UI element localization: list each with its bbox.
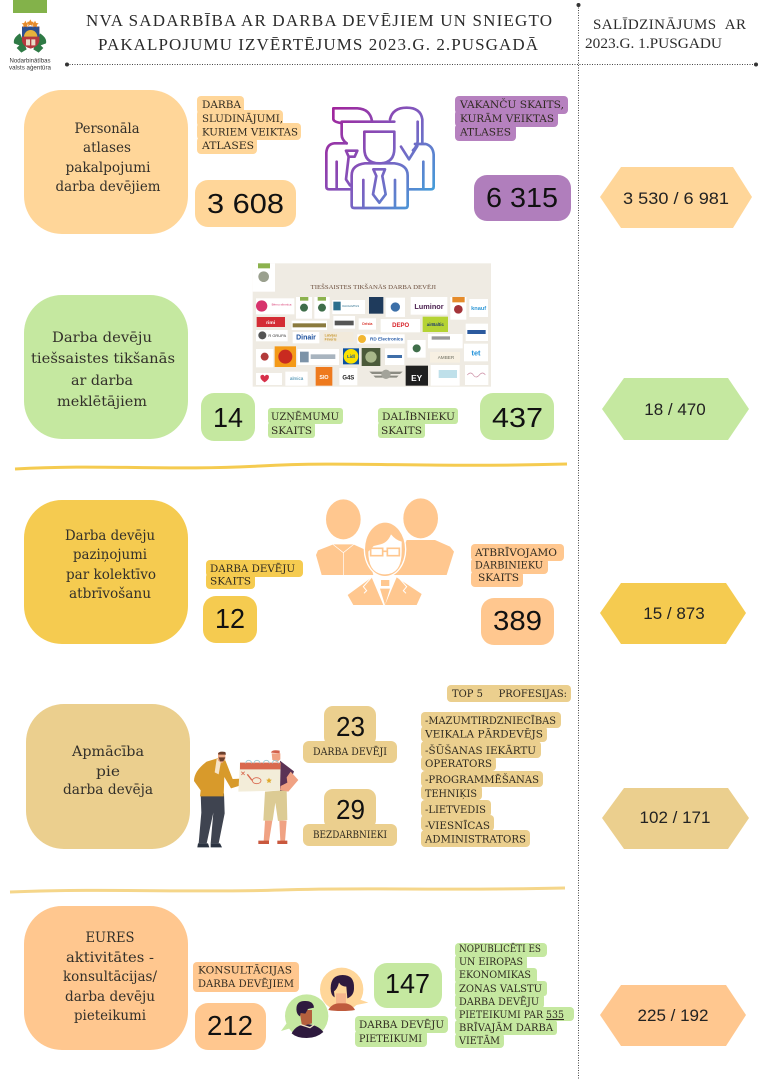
stat: unemployed 29: 29 bbox=[336, 794, 365, 825]
image: employer logos collage: almica bbox=[290, 376, 304, 381]
image: employer logos collage: TIEŠSAISTES TIKŠANĀS DARBA DEVĒJI bbox=[311, 283, 436, 291]
label: employer applications: DARBA DEVĒJU bbox=[359, 1018, 444, 1031]
icon: conversation avatars bbox=[281, 968, 368, 1038]
comparison hexagon 4: 102 / 171 bbox=[640, 808, 710, 827]
number: participants bbox=[480, 393, 554, 440]
panel: online meetings: meklētājiem bbox=[57, 394, 147, 410]
logo: Nodarbinātības valsts aģentūra bbox=[9, 0, 51, 72]
comparison hexagon 5 bbox=[600, 985, 746, 1046]
label: employers count bbox=[206, 560, 303, 589]
label: job ads: KURIEM VEIKTAS bbox=[202, 126, 298, 138]
panel: EURES activities bbox=[24, 906, 188, 1050]
label: employer applications bbox=[355, 1016, 448, 1047]
image: employer logos collage bbox=[253, 263, 491, 387]
label: vacancies: ATLASES bbox=[459, 126, 511, 138]
image: employer logos collage: RD Electronics bbox=[370, 337, 404, 342]
number: participants: 437 bbox=[492, 402, 543, 433]
text block: unpublished EEA vacancies: UN EIROPAS bbox=[459, 956, 523, 968]
panel: online meetings bbox=[24, 295, 188, 439]
logo: Nodarbinātības valsts aģentūra: valsts aģentūra bbox=[9, 64, 51, 72]
number: applications bbox=[374, 963, 442, 1008]
list: top 5 professions: -ŠŪŠANAS IEKĀRTU bbox=[425, 743, 536, 757]
number: employees: 389 bbox=[493, 605, 542, 636]
comparison hexagon 3: 15 / 873 bbox=[643, 604, 705, 623]
number: job ads: 3 608 bbox=[207, 188, 284, 219]
icon: business people bbox=[326, 108, 434, 208]
label: participants: SKAITS bbox=[381, 425, 422, 437]
comparison column heading bbox=[585, 17, 746, 52]
panel: workplace training bbox=[26, 704, 190, 849]
image: employer logos collage: DAUGAVPILS bbox=[342, 304, 359, 308]
panel: collective redundancy: atbrīvošanu bbox=[69, 586, 151, 602]
panel: workplace training: darba devēja bbox=[63, 782, 153, 798]
image: employer logos collage: EY bbox=[411, 373, 423, 383]
number: vacancies: 6 315 bbox=[486, 182, 558, 213]
image: employer logos collage: SIO bbox=[319, 375, 329, 381]
panel: EURES activities: aktivitātes - bbox=[66, 950, 154, 966]
image: employer logos collage: Drīsla bbox=[362, 322, 373, 326]
number: job ads bbox=[195, 180, 296, 227]
title bbox=[86, 11, 552, 54]
label: companies bbox=[268, 408, 343, 438]
label: employees dismissed: SKAITS bbox=[478, 572, 519, 584]
image: employer logos collage: Luminor bbox=[414, 302, 444, 311]
list: top 5 professions: TEHNIĶIS bbox=[425, 788, 477, 800]
stat: unemployed 29: BEZDARBNIEKI bbox=[313, 829, 387, 841]
panel: collective redundancy: Darba devēju bbox=[65, 528, 155, 544]
label: vacancies bbox=[455, 96, 568, 141]
label: participants bbox=[378, 408, 458, 438]
panel: EURES activities: konsultācijas/ bbox=[63, 969, 157, 985]
panel: recruitment services: pakalpojumi bbox=[66, 160, 151, 176]
panel: recruitment services: Personāla bbox=[74, 121, 140, 137]
label: vacancies: KURĀM VEIKTAS bbox=[460, 112, 554, 125]
image: employer logos collage: rimi bbox=[266, 320, 276, 326]
number: employers: 12 bbox=[215, 603, 245, 634]
number: employees bbox=[481, 598, 554, 645]
text block: unpublished EEA vacancies: NOPUBLICĒTI ES bbox=[459, 942, 541, 955]
stat: employers 23: 23 bbox=[336, 711, 365, 742]
logo: Nodarbinātības valsts aģentūra: Nodarbinātības bbox=[10, 58, 51, 64]
text block: unpublished EEA vacancies: EKONOMIKAS bbox=[459, 969, 531, 981]
panel: online meetings: ar darba bbox=[71, 373, 133, 389]
panel: collective redundancy bbox=[24, 500, 188, 644]
number: applications: 147 bbox=[385, 968, 430, 999]
image: employer logos collage: Bērnu slimnīca bbox=[272, 303, 292, 307]
number: employers bbox=[203, 596, 257, 643]
panel: collective redundancy: paziņojumi bbox=[73, 547, 148, 563]
list: top 5 professions: VEIKALA PĀRDEVĒJS bbox=[424, 728, 543, 740]
list: top 5 professions bbox=[421, 685, 571, 847]
panel: recruitment services: atlases bbox=[83, 140, 131, 156]
label: job ads: DARBA bbox=[202, 99, 241, 111]
image: employer logos collage: DEPO bbox=[392, 323, 409, 329]
comparison column heading: SALĪDZINĀJUMS AR bbox=[593, 17, 746, 33]
image: employer logos collage: tet bbox=[472, 348, 481, 357]
panel: workplace training: Apmācība bbox=[71, 744, 144, 760]
list: top 5 professions: -MAZUMTIRDZNIECĪBAS bbox=[425, 714, 556, 727]
text block: unpublished EEA vacancies: BRĪVAJĀM DARBA bbox=[459, 1021, 553, 1034]
panel: EURES activities: pieteikumi bbox=[74, 1008, 147, 1024]
label: employers count: DARBA DEVĒJU bbox=[210, 562, 295, 575]
stat: employers 23 bbox=[303, 706, 397, 763]
list: top 5 professions: -LIETVEDIS bbox=[425, 804, 486, 816]
panel: online meetings: tiešsaistes tikšanās bbox=[31, 351, 175, 367]
panel: workplace training: pie bbox=[96, 764, 120, 780]
number: companies bbox=[201, 393, 255, 441]
number: consultations: 212 bbox=[207, 1010, 253, 1041]
label: employers count: SKAITS bbox=[210, 576, 251, 588]
number: consultations bbox=[195, 1003, 266, 1050]
comparison hexagon 5: 225 / 192 bbox=[638, 1006, 708, 1025]
panel: recruitment services: darba devējiem bbox=[56, 179, 161, 195]
panel: online meetings: Darba devēju bbox=[52, 330, 152, 346]
label: vacancies: VAKANČU SKAITS, bbox=[459, 97, 564, 111]
panel: EURES activities: darba devēju bbox=[65, 989, 155, 1005]
comparison hexagon 3 bbox=[600, 583, 746, 644]
label: companies: SKAITS bbox=[271, 425, 312, 437]
list: top 5 professions: OPERATORS bbox=[425, 758, 492, 770]
number: companies: 14 bbox=[213, 402, 243, 433]
text block: unpublished EEA vacancies: VIETĀM bbox=[458, 1034, 500, 1047]
label: participants: DALĪBNIEKU bbox=[382, 410, 455, 423]
stat: unemployed 29 bbox=[303, 789, 397, 846]
image: employer logos collage: Dinair bbox=[296, 334, 316, 341]
image: employer logos collage: knauf bbox=[471, 306, 486, 312]
label: employees dismissed: ATBRĪVOJAMO bbox=[474, 546, 557, 559]
title: PAKALPOJUMU IZVĒRTĒJUMS 2023.G. 2.PUSGADĀ bbox=[98, 35, 539, 54]
image: employer logos collage: Finieris bbox=[325, 337, 337, 341]
image: employer logos collage: AMBER bbox=[438, 355, 455, 360]
image: employer logos collage: airBaltic bbox=[427, 322, 444, 327]
comparison hexagon 2: 18 / 470 bbox=[644, 400, 706, 419]
panel: EURES activities: EURES bbox=[86, 930, 134, 946]
text block: unpublished EEA vacancies: ZONAS VALSTU bbox=[459, 983, 542, 995]
panel: recruitment services bbox=[24, 90, 188, 234]
illustration: two people with calendar bbox=[194, 750, 298, 847]
icon: three people with glasses bbox=[316, 498, 454, 605]
label: consultations bbox=[193, 962, 299, 992]
image: employer logos collage: Lidl bbox=[347, 354, 355, 359]
list: top 5 professions: TOP 5 PROFESIJAS: bbox=[452, 688, 567, 700]
panel: collective redundancy: par kolektīvo bbox=[66, 567, 156, 583]
text block: unpublished EEA vacancies: PIETEIKUMI PAR 535 bbox=[459, 1009, 564, 1021]
text block: unpublished EEA vacancies: DARBA DEVĒJU bbox=[459, 995, 539, 1008]
label: consultations: DARBA DEVĒJIEM bbox=[198, 977, 294, 990]
image: employer logos collage: R GRUPA bbox=[268, 333, 287, 338]
list: top 5 professions: -PROGRAMMĒŠANAS bbox=[425, 772, 539, 786]
comparison hexagon 1: 3 530 / 6 981 bbox=[623, 189, 729, 208]
image: employer logos collage: G4S bbox=[342, 375, 354, 381]
stat: employers 23: DARBA DEVĒJI bbox=[313, 745, 387, 758]
list: top 5 professions: ADMINISTRATORS bbox=[424, 834, 526, 846]
comparison column heading: 2023.G. 1.PUSGADU bbox=[585, 36, 722, 52]
number: vacancies bbox=[474, 175, 571, 221]
label: employees dismissed: DARBINIEKU bbox=[475, 560, 543, 572]
label: job ads: ATLASES bbox=[201, 140, 254, 152]
title: NVA SADARBĪBA AR DARBA DEVĒJIEM UN SNIEGTO bbox=[86, 11, 552, 30]
label: companies: UZŅĒMUMU bbox=[271, 410, 339, 423]
list: top 5 professions: -VIESNĪCAS bbox=[425, 819, 490, 832]
comparison hexagon 1 bbox=[600, 167, 752, 228]
label: job ads bbox=[197, 96, 301, 154]
label: consultations: KONSULTĀCIJAS bbox=[198, 964, 292, 976]
label: employer applications: PIETEIKUMI bbox=[359, 1033, 422, 1045]
image: employer logos collage: Latvijas bbox=[325, 334, 337, 338]
comparison hexagon 4 bbox=[602, 788, 749, 849]
label: employees dismissed bbox=[471, 544, 564, 587]
comparison hexagon 2 bbox=[602, 378, 749, 440]
text block: unpublished EEA vacancies bbox=[455, 942, 574, 1048]
label: job ads: SLUDINĀJUMI, bbox=[202, 112, 283, 125]
